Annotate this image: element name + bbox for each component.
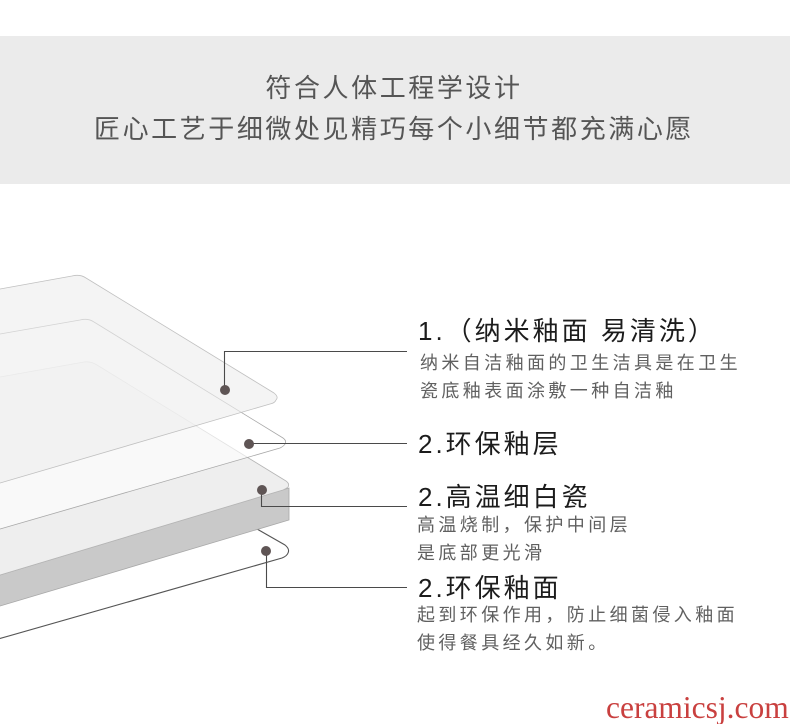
- top nano glaze layer: [0, 275, 277, 486]
- watermark: ceramicsj.com: [606, 690, 789, 724]
- description 3: 高温烧制，保护中间层: [417, 515, 631, 535]
- callout 4 text: [417, 573, 738, 653]
- description 1: [420, 353, 741, 401]
- callout leader 2: [244, 439, 407, 449]
- middle glaze layer: [0, 319, 286, 532]
- description 1: 瓷底釉表面涂敷一种自洁釉: [420, 381, 677, 401]
- description 4: 使得餐具经久如新。: [417, 633, 610, 653]
- heading 4: 2.环保釉面: [418, 573, 562, 603]
- bottom glaze layer outline: [0, 529, 289, 642]
- title line 2: 匠心工艺于细微处见精巧每个小细节都充满心愿: [94, 114, 694, 144]
- description 4: 起到环保作用，防止细菌侵入釉面: [417, 605, 738, 625]
- callout 3 text: [417, 482, 631, 563]
- description 3: [417, 515, 631, 563]
- header band: [0, 36, 790, 184]
- description 4: [417, 605, 738, 653]
- callout 1 text: [418, 316, 741, 401]
- callout leader 1: [220, 352, 407, 395]
- heading 2: 2.环保釉层: [418, 429, 562, 459]
- title line 1: 符合人体工程学设计: [265, 73, 523, 103]
- porcelain body side: [0, 488, 289, 609]
- callout leader 4: [261, 546, 407, 588]
- porcelain body top: [0, 362, 289, 578]
- description 1: 纳米自洁釉面的卫生洁具是在卫生: [420, 353, 741, 373]
- description 3: 是底部更光滑: [417, 543, 545, 563]
- callout leader 3: [257, 485, 407, 506]
- heading 3: 2.高温细白瓷: [418, 482, 591, 512]
- heading 1: 1.（纳米釉面 易清洗）: [418, 316, 717, 346]
